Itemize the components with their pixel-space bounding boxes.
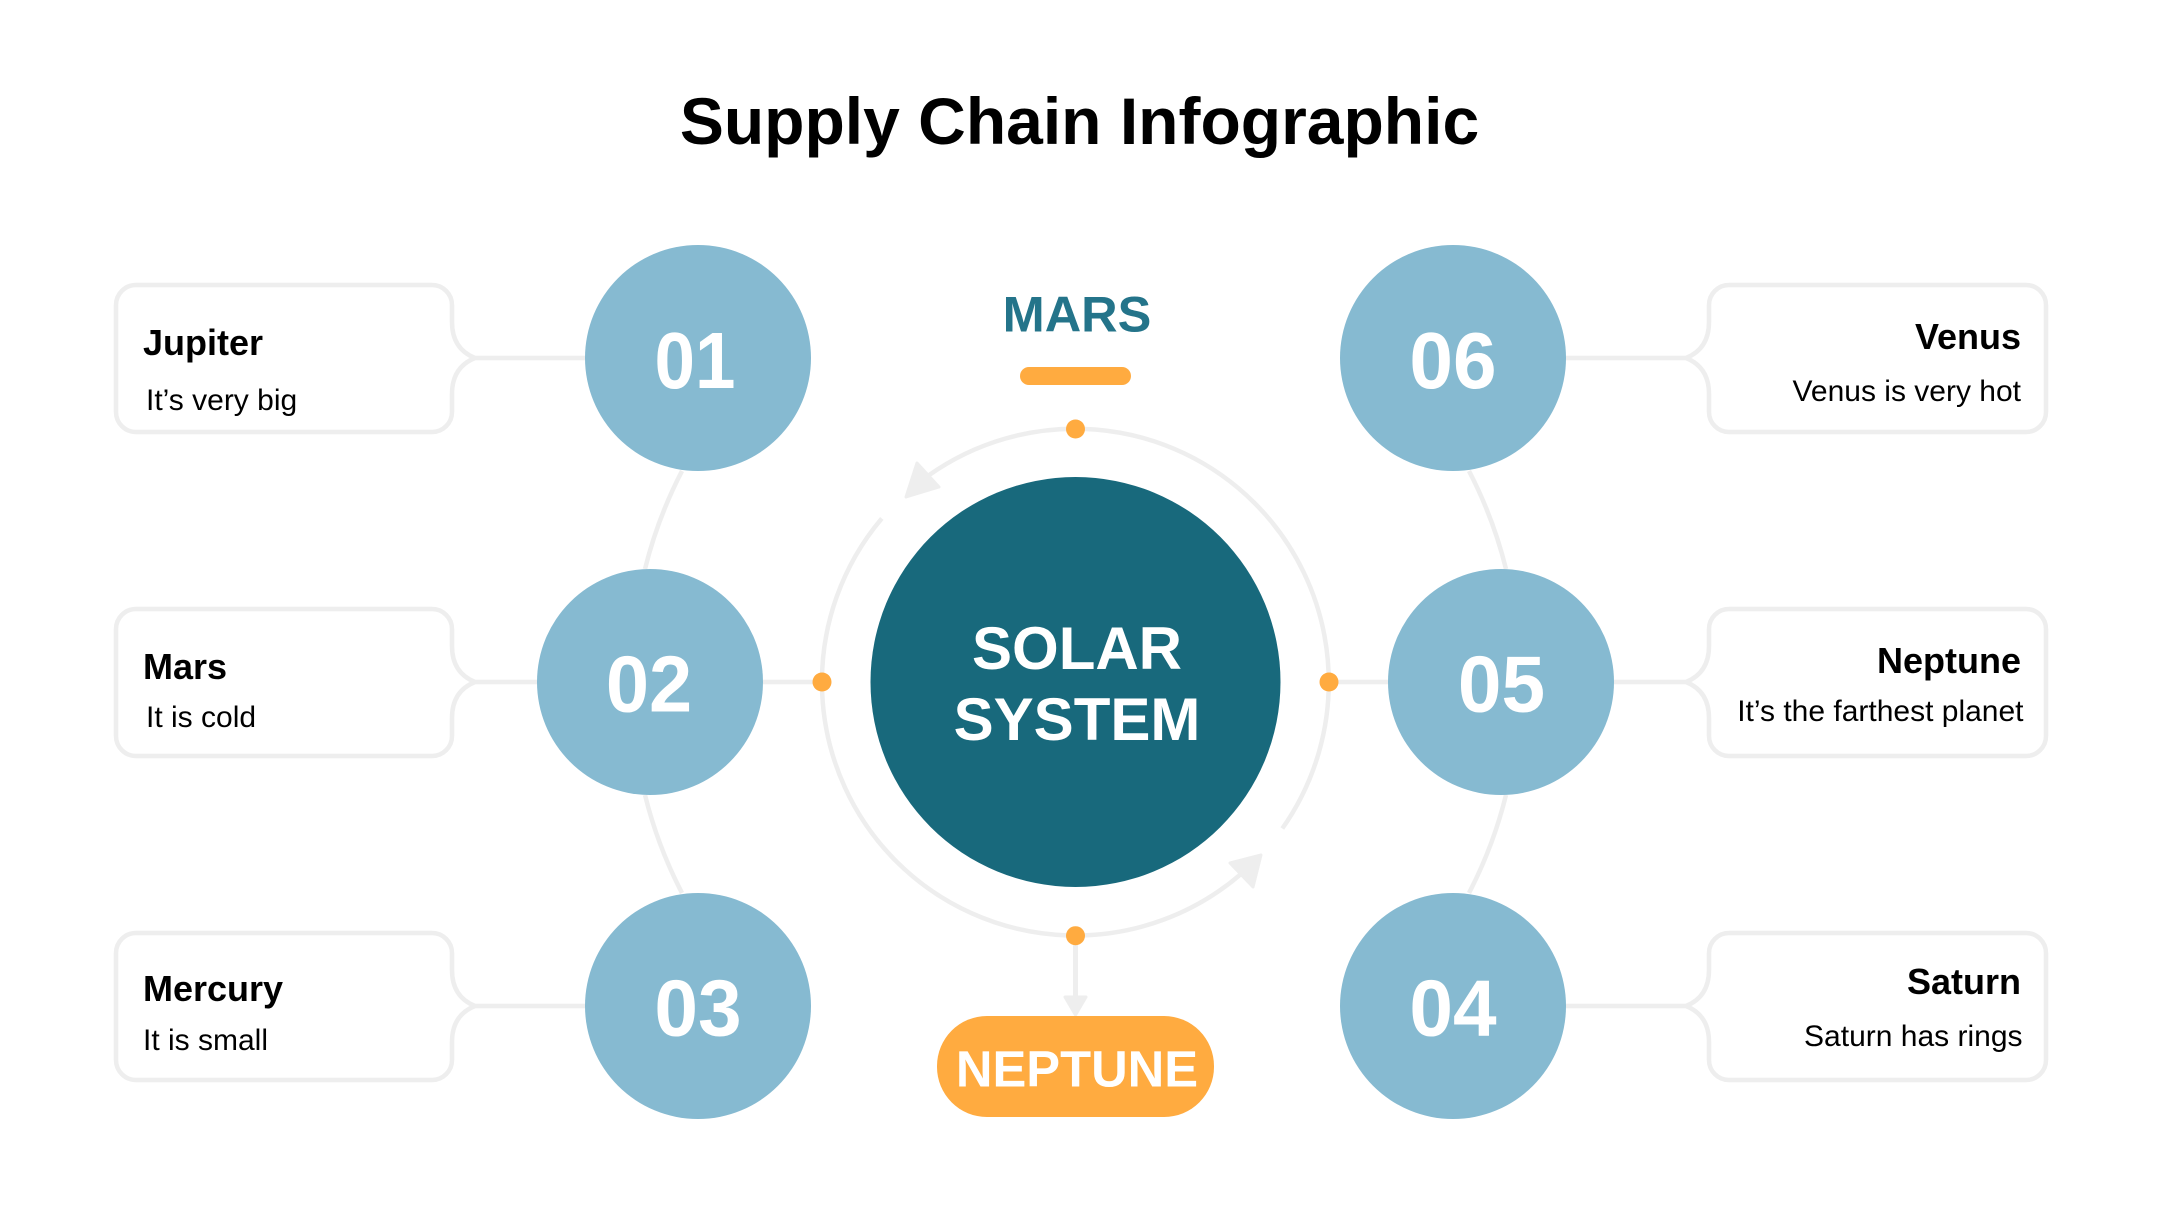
card: Mars: Mars <box>143 646 227 687</box>
card: Saturn <box>1560 933 2046 1080</box>
orange bar <box>1020 367 1131 385</box>
ring dots <box>812 420 1338 945</box>
card: Mars <box>116 609 540 756</box>
step 03 <box>585 893 811 1119</box>
step 01: 01 <box>655 317 735 406</box>
card: Mercury: Mercury <box>143 968 283 1009</box>
arrow to Neptune pill <box>1065 936 1086 1015</box>
centre circle: SYSTEM <box>954 686 1200 753</box>
card: Saturn: Saturn <box>1907 961 2021 1002</box>
card: Jupiter: Jupiter <box>143 322 263 363</box>
heading: MARS: MARS <box>1003 286 1151 342</box>
centre circle <box>870 477 1280 887</box>
card: Venus <box>1560 285 2046 432</box>
card: Saturn: Saturn has rings <box>1804 1020 2022 1053</box>
centre circle: SOLAR <box>972 615 1182 682</box>
card: Venus: Venus <box>1915 316 2021 357</box>
card: Venus: Venus is very hot <box>1793 375 2022 408</box>
step 05: 05 <box>1458 639 1545 729</box>
pill: NEPTUNE <box>937 1016 1214 1117</box>
card: Mercury <box>116 933 590 1080</box>
connector arcs: left and right <box>645 471 1506 893</box>
step 06 <box>1340 245 1566 471</box>
pill: NEPTUNE: NEPTUNE <box>956 1040 1198 1098</box>
card: Jupiter: It’s very big <box>146 384 297 417</box>
step 01 <box>585 245 811 471</box>
title: Supply Chain Infographic <box>680 84 1479 158</box>
left ring arc with arrow <box>822 518 1261 935</box>
step 04: 04 <box>1409 963 1497 1053</box>
card: Mercury: It is small <box>143 1024 268 1057</box>
card: Neptune: Neptune <box>1877 640 2021 681</box>
step 03: 03 <box>654 963 742 1053</box>
card: Mars: It is cold <box>146 701 256 734</box>
step 04 <box>1340 893 1566 1119</box>
card: Neptune <box>1610 609 2046 756</box>
card: Neptune: It’s the farthest planet <box>1737 695 2024 728</box>
step 05 <box>1388 569 1614 795</box>
right ring arc with arrow <box>906 429 1329 828</box>
step 02: 02 <box>606 639 692 729</box>
spokes from ring to steps <box>763 680 1388 684</box>
step 02 <box>537 569 763 795</box>
step 06: 06 <box>1409 315 1497 405</box>
card: Jupiter <box>116 285 590 432</box>
